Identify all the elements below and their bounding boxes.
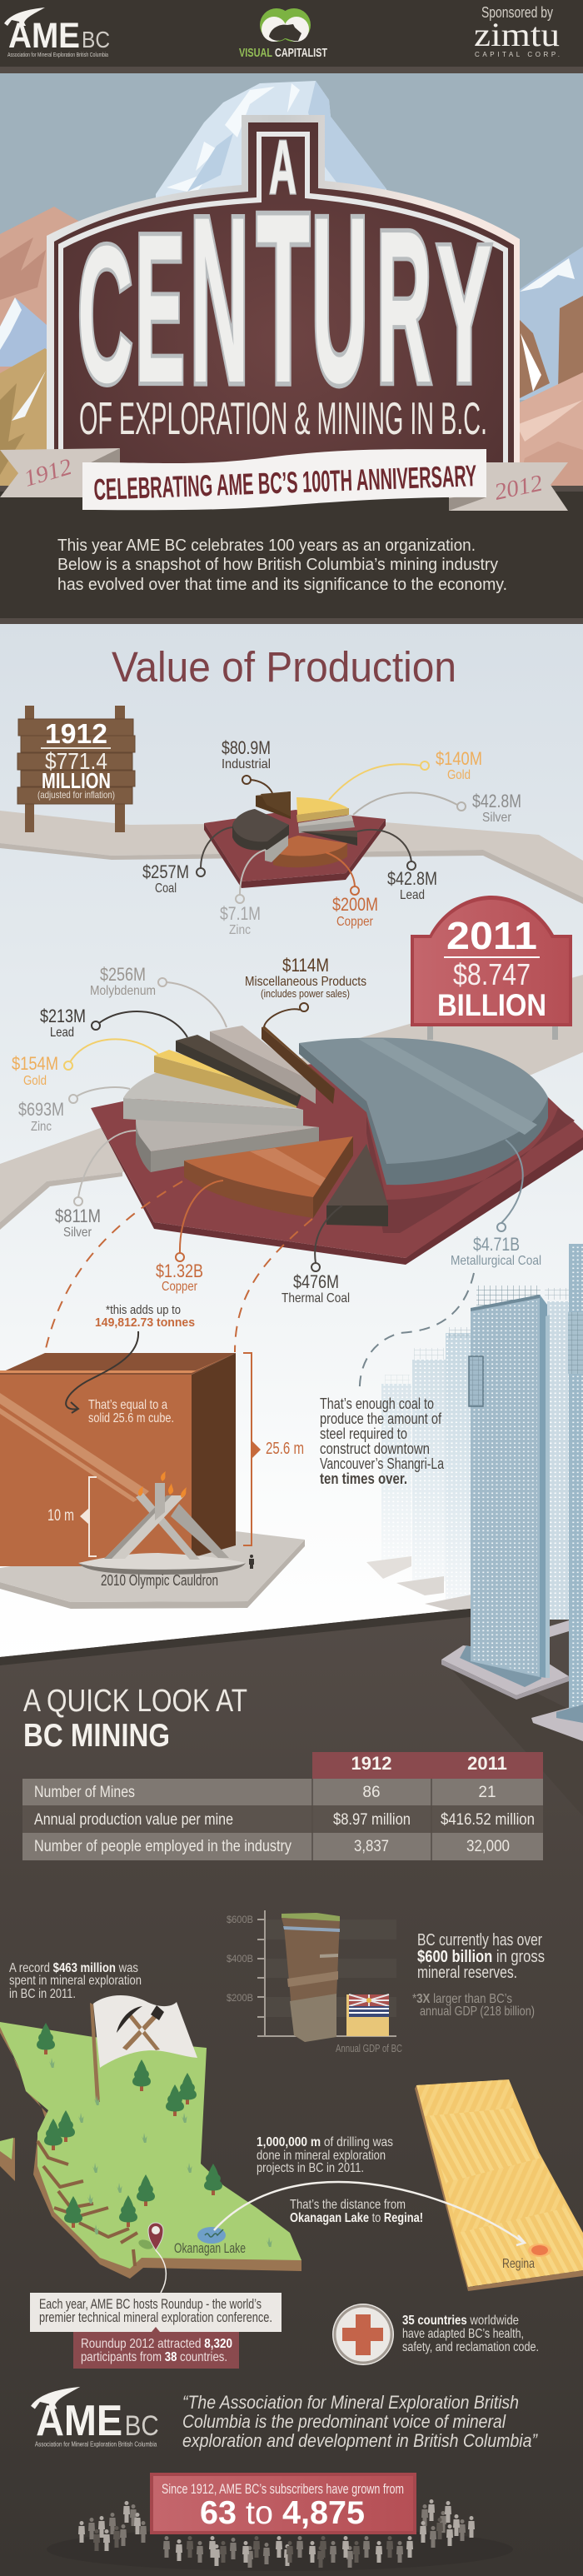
- label: copper: [332, 894, 378, 929]
- sponsor: zimtu: CAPITAL CORP.: [475, 51, 560, 58]
- sky and mountains: [0, 73, 583, 500]
- fjord edges: [37, 2141, 137, 2266]
- ribbon banner: [0, 448, 568, 511]
- dark lower section background: [0, 1597, 583, 2576]
- map: British Columbia: [0, 2022, 301, 2279]
- callout: subscribers: Since 1912, AME BC’s subscribers have grown from: [162, 2481, 404, 2497]
- cauldron flames: [138, 1471, 187, 1498]
- mountain: snow right: [516, 247, 583, 400]
- label: copper: [156, 1261, 203, 1294]
- note text: steel required to: [320, 1425, 407, 1442]
- bracket: 25.6 m height: 25.6 m: [266, 1440, 304, 1458]
- logo: Visual Capitalist: CAPITALIST: [275, 46, 327, 60]
- callout: subscribers: 63 to 4,875: [200, 2495, 365, 2531]
- mountain: main peak: [156, 81, 386, 250]
- towers: foreground: [441, 1244, 583, 1816]
- sign: 1912 value: [17, 706, 135, 832]
- attendance box: Roundup 2012 attracted 8,320: [81, 2337, 232, 2351]
- label: silver: $42.8M: [472, 791, 521, 811]
- tower: main: [441, 1286, 569, 1700]
- callout line: metallurgical coal: [501, 1140, 523, 1223]
- title word CENTURY: E: [135, 192, 185, 427]
- sign: 1912 value: $771.4: [45, 748, 107, 774]
- text: distance: That’s the distance from: [290, 2198, 406, 2212]
- platform under cube: [0, 1531, 305, 1609]
- cube note text: That’s equal to a: [88, 1398, 167, 1412]
- table header: [312, 1752, 543, 1779]
- text: drilling: done in mineral exploration: [257, 2149, 386, 2163]
- label: lead: Lead: [400, 888, 425, 902]
- text: safety code: have adapted BC’s health,: [402, 2327, 524, 2341]
- sign: 1912 value: (adjusted for inflation): [37, 789, 115, 801]
- grass tufts: [49, 2058, 272, 2247]
- bar: BC GDP flag: [346, 1994, 389, 2036]
- note text: produce the amount of: [320, 1410, 442, 1427]
- text: drilling: projects in BC in 2011.: [257, 2161, 364, 2175]
- mountain: brown right: [516, 296, 583, 400]
- logo: AME BC footer: BC: [125, 2410, 159, 2442]
- label: lead: $213M: [40, 1006, 86, 1026]
- label: zinc: Zinc: [229, 923, 251, 937]
- sign: 1912 value: MILLION: [42, 768, 111, 793]
- callout: Roundup: [30, 2250, 282, 2369]
- pin: Vancouver: [137, 2223, 163, 2251]
- table row: value per mine: $8.97 million: [333, 1811, 411, 1829]
- callout line: coal: [201, 827, 232, 868]
- text: gross mineral reserves: [412, 1931, 545, 2019]
- label: industrial: $80.9M: [222, 737, 271, 758]
- label: coal: Coal: [155, 881, 177, 896]
- sponsor: zimtu: [474, 4, 560, 58]
- bracket: 10 m height: [47, 1477, 97, 1556]
- text: safety code: 35 countries worldwide: [402, 2314, 519, 2328]
- logo: AME BC: AME: [8, 16, 80, 56]
- sign legs: [427, 1026, 558, 1040]
- label: lead: Lead: [50, 1026, 74, 1040]
- year 1912: 1912: [21, 454, 75, 492]
- tonnes note: 149,812.73 tonnes: [95, 1315, 195, 1330]
- label: silver: [472, 791, 521, 825]
- attendance box: [73, 2327, 239, 2369]
- label: silver: Silver: [63, 1226, 92, 1240]
- text: gross mineral reserves: *3X larger than BC’s: [412, 1992, 512, 2006]
- label: gold: $140M: [436, 748, 482, 769]
- slice: gold: [154, 1050, 296, 1108]
- labels: 2011 values: [12, 955, 541, 1305]
- sign: 2011 value: 2011: [446, 914, 537, 957]
- note text: That’s enough coal to: [320, 1395, 434, 1412]
- slice: copper: [184, 1136, 353, 1218]
- road: upper: [0, 811, 583, 904]
- quote: exploration and development in British Columbia”: [182, 2430, 538, 2451]
- label: miscellaneous: Miscellaneous Products: [245, 975, 366, 989]
- label: gold: Gold: [23, 1074, 47, 1088]
- crowd: mid-tone people: [88, 2504, 466, 2568]
- Roundup box: Each year, AME BC hosts Roundup - the world’s: [39, 2297, 262, 2312]
- label: lead: [387, 868, 437, 902]
- table row: mines: 21: [478, 1784, 496, 1801]
- dashed line: coal to note: [360, 1273, 474, 1394]
- label: zinc: $7.1M: [220, 903, 261, 924]
- cube: copper volume: [0, 1353, 236, 1566]
- prairie: Saskatchewan block: [415, 2079, 583, 2291]
- heading: Value of Production: Value of Production: [112, 643, 456, 691]
- ribbon main: [82, 449, 486, 510]
- callout line: zinc: [240, 850, 266, 895]
- tower: mid-ground faded: [545, 1288, 571, 1637]
- chart: mineral reserves vs GDP: $200B: [227, 1992, 253, 2004]
- text: gross mineral reserves: $600 billion in gross: [417, 1948, 545, 1966]
- cube note text: [88, 1398, 174, 1425]
- slice: zinc: [265, 835, 288, 862]
- intro text: Below is a snapshot of how British Columbia’s mining industry: [57, 556, 498, 574]
- label: industrial: Industrial: [222, 757, 271, 771]
- slice: metallurgical coal: [299, 1038, 548, 1185]
- label: coal: $257M: [142, 861, 189, 882]
- text: safety code: [402, 2314, 539, 2354]
- ribbon right tail: [449, 462, 568, 511]
- logo: AME BC: Association for Mineral Exploration British Columbia: [7, 52, 108, 58]
- text: drilling: 1,000,000 m of drilling was: [257, 2135, 393, 2149]
- label: copper: $1.32B: [156, 1261, 203, 1281]
- label: thermal coal: Thermal Coal: [282, 1291, 350, 1305]
- logo: AME BC footer: AME: [36, 2397, 122, 2445]
- mountain: tan left: [0, 348, 58, 500]
- table row: mines: [22, 1779, 543, 1805]
- arrow: curved to cube note: [66, 1331, 138, 1413]
- callout line: lead: [357, 830, 411, 861]
- intro text: This year AME BC celebrates 100 years as an organization.: [57, 537, 476, 555]
- sign text: 1912: [45, 718, 107, 749]
- chart: mineral reserves vs GDP: $400B: [227, 1953, 253, 1964]
- callout line: copper: [180, 1181, 223, 1253]
- text: record exploration spending: [9, 1961, 142, 2001]
- label: coal: [142, 861, 189, 896]
- crowd of people: [47, 2499, 513, 2571]
- slice: miscellaneous: [262, 1026, 335, 1104]
- title word CENTURY: N: [190, 169, 249, 432]
- mountain: snow left: [0, 297, 58, 367]
- logo: AME BC footer: Association for Mineral Exploration British Columbia: [35, 2439, 157, 2448]
- label: thermal coal: [282, 1271, 350, 1305]
- table header: 2011: [467, 1753, 507, 1774]
- attendance box: participants from 38 countries.: [81, 2350, 227, 2364]
- label: gold: Gold: [447, 768, 471, 782]
- callout: subscribers: [150, 2473, 416, 2534]
- axis and ticks: [257, 1910, 396, 2036]
- prairie: Saskatchewan block: Regina: [502, 2257, 535, 2271]
- table row: value per mine: [22, 1805, 543, 1833]
- callout line: silver: [353, 792, 457, 815]
- label: molybdenum: [90, 964, 156, 998]
- table header: 1912: [351, 1753, 391, 1774]
- tower: right: [531, 1244, 583, 1741]
- bar: gross mineral reserves: [282, 1913, 340, 2042]
- callout line: copper: [326, 852, 355, 886]
- label: copper: Copper: [162, 1280, 198, 1294]
- icon: safety cross: [332, 2304, 394, 2365]
- intro text: [57, 537, 507, 594]
- callout line: gold: [70, 1039, 158, 1062]
- callout line: industrial: [251, 780, 272, 793]
- note text: Vancouver’s Shangri-La: [320, 1455, 445, 1472]
- label: copper: $200M: [332, 894, 378, 915]
- slice: lead: [176, 1035, 303, 1106]
- slice: copper: [273, 836, 347, 867]
- lake: Okanagan: [174, 2227, 246, 2256]
- icon: Olympic cauldron: [78, 1471, 254, 1575]
- tonnes note: *this adds up to: [106, 1303, 181, 1317]
- label: silver: $811M: [55, 1206, 101, 1226]
- map land: [0, 2022, 301, 2269]
- label: miscellaneous: (includes power sales): [261, 987, 350, 1000]
- bracket: 25.6 m height: [243, 1353, 304, 1545]
- caption: Olympic cauldron: 2010 Olympic Cauldron: [101, 1572, 218, 1589]
- caption: annual GDP: Annual GDP of BC: [336, 2042, 402, 2054]
- tonnes note: [95, 1303, 195, 1330]
- title word CENTURY: C: [77, 205, 132, 423]
- label: copper: Copper: [336, 915, 374, 929]
- sign posts: [25, 706, 125, 832]
- callout line: thermal coal: [315, 1206, 342, 1263]
- Regina marker: [528, 2244, 551, 2257]
- intro section: [0, 486, 583, 624]
- ribbon left tail: [0, 448, 120, 497]
- text: gross mineral reserves: mineral reserves.: [417, 1964, 517, 1982]
- chart: mineral reserves vs GDP: [227, 1910, 402, 2054]
- platter: [91, 1108, 583, 1265]
- sign: 2011 value: $8.747: [453, 957, 531, 991]
- slice: lead: [301, 831, 357, 846]
- dashed lines: copper to cube: [45, 1181, 312, 1352]
- label: gold: $154M: [12, 1053, 58, 1074]
- text: safety code: safety, and reclamation code.: [402, 2340, 539, 2354]
- title word CENTURY: [77, 164, 492, 433]
- callout line: molybdenum: [167, 982, 227, 1027]
- table row: mines: Number of Mines: [34, 1784, 135, 1801]
- text: distance: Okanagan Lake to Regina!: [290, 2211, 423, 2225]
- title shield: [47, 115, 520, 517]
- note text: construct downtown: [320, 1440, 430, 1457]
- crowd: dark people: [93, 2518, 443, 2568]
- text: drilling: [257, 2135, 393, 2175]
- text: record exploration spending: in BC in 2011.: [9, 1987, 76, 2001]
- sponsor: zimtu: Sponsored by: [481, 4, 553, 21]
- Roundup box: premier technical mineral exploration conference.: [39, 2310, 272, 2325]
- logo: AME BC: BC: [82, 27, 110, 52]
- note: coal to steel: [320, 1273, 474, 1487]
- title word CENTURY: T: [257, 164, 310, 433]
- slice: silver: [298, 815, 355, 833]
- label: metallurgical coal: [451, 1234, 541, 1268]
- callouts: 2011 values: [64, 978, 523, 1271]
- cauldron legs: [104, 1483, 229, 1560]
- callout line: silver: [78, 1131, 136, 1197]
- cube note with arrow: [66, 1303, 195, 1425]
- bracket: 10 m height: 10 m: [47, 1507, 74, 1525]
- table row: employed: Number of people employed in the industry: [34, 1838, 292, 1855]
- title letter A: A: [269, 125, 296, 210]
- mountain: pink right: [516, 372, 583, 492]
- line: pin to callout: [156, 2250, 166, 2293]
- label: thermal coal: $476M: [293, 1271, 339, 1292]
- flag: pick and hammer: [90, 1995, 197, 2105]
- text: record exploration spending: A record $463 million was: [9, 1961, 138, 1975]
- callout line: gold: [329, 764, 421, 800]
- quote: “The Association for Mineral Exploration British: [182, 2392, 519, 2413]
- title word CENTURY: R: [376, 186, 431, 428]
- trees: [37, 2023, 222, 2228]
- sign planks: [17, 719, 135, 804]
- text: gross mineral reserves: annual GDP (218 billion): [420, 2004, 535, 2019]
- logo: AME BC footer: [31, 2387, 159, 2448]
- label: molybdenum: Molybdenum: [90, 984, 156, 998]
- sponsor: zimtu: zimtu: [474, 16, 560, 53]
- slice: thermal coal: [326, 1144, 388, 1226]
- towers: faded background: [366, 1327, 471, 1616]
- heading: A Quick Look at BC Mining: [23, 1684, 247, 1754]
- labels: 1912 values: [142, 737, 521, 937]
- text: gross mineral reserves: BC currently has over: [417, 1931, 542, 1949]
- callout line: zinc: [77, 1087, 130, 1096]
- header bar: [0, 0, 583, 73]
- slice: zinc: [123, 1071, 303, 1126]
- crowd: light people: [78, 2499, 475, 2566]
- title word CENTURY: Y: [436, 205, 492, 424]
- platter: [204, 819, 386, 888]
- sign: 2011 value: BILLION: [437, 988, 546, 1022]
- slice: gold: [296, 797, 349, 822]
- label: silver: Silver: [482, 811, 512, 825]
- note text: [320, 1395, 445, 1487]
- label: silver: [55, 1206, 101, 1240]
- lake: Okanagan: Okanagan Lake: [174, 2240, 246, 2256]
- label: lead: [40, 1006, 86, 1040]
- heading: A Quick Look at BC Mining: A QUICK LOOK AT: [23, 1684, 247, 1719]
- text: distance: [290, 2198, 423, 2225]
- slice: molybdenum: [210, 1026, 316, 1104]
- cube note text: solid 25.6 m cube.: [88, 1411, 174, 1425]
- label: gold: [436, 748, 482, 782]
- heading: A Quick Look at BC Mining: BC MINING: [23, 1718, 170, 1754]
- label: lead: $42.8M: [387, 868, 437, 889]
- island: Vancouver Island: [0, 2138, 15, 2181]
- mountain: pink left: [0, 207, 100, 400]
- page background: light section: [0, 624, 583, 1665]
- label: molybdenum: $256M: [100, 964, 146, 985]
- label: gold: [12, 1053, 58, 1088]
- arrow: Okanagan Lake to Regina: [214, 2182, 525, 2245]
- logo: AME BC: [4, 7, 110, 58]
- table row: employed: [22, 1833, 543, 1860]
- slice: silver: [136, 1119, 319, 1172]
- label: zinc: Zinc: [31, 1120, 52, 1134]
- cube light stripe: [0, 1393, 149, 1502]
- label: zinc: [220, 903, 261, 937]
- note text: ten times over.: [320, 1470, 407, 1487]
- slice: coal: [232, 809, 289, 851]
- map edge: [0, 2022, 301, 2279]
- year 2012: 2012: [492, 470, 545, 506]
- table row: value per mine: $416.52 million: [441, 1811, 535, 1829]
- chart: mineral reserves vs GDP: $600B: [227, 1914, 253, 1925]
- quote: [182, 2392, 538, 2451]
- label: miscellaneous: $114M: [282, 955, 329, 976]
- person for scale: [249, 1555, 254, 1569]
- chart: 1912 production pie: [204, 791, 386, 888]
- quote: Columbia is the predominant voice of mineral: [182, 2411, 506, 2432]
- logo: Visual Capitalist: [239, 8, 327, 60]
- callouts: 1912 values: [197, 761, 466, 903]
- table row: mines: 86: [362, 1784, 381, 1801]
- sign: 2011 value: [411, 896, 572, 1040]
- slice: industrial: [256, 791, 291, 819]
- chart bands: [265, 1920, 396, 2017]
- label: miscellaneous: [245, 955, 366, 1000]
- table row: value per mine: Annual production value per mine: [34, 1811, 233, 1829]
- table row: employed: 3,837: [354, 1838, 389, 1855]
- road: lower: [0, 975, 583, 1230]
- Roundup box: [30, 2293, 282, 2332]
- label: metallurgical coal: Metallurgical Coal: [451, 1254, 541, 1268]
- table: 1912 vs 2011: [22, 1752, 543, 1860]
- chart: 2011 production pie: [91, 1026, 583, 1265]
- tower shadows: [441, 1658, 583, 1816]
- callout line: lead: [99, 1011, 187, 1037]
- intro text: has evolved over that time and its significance to the economy.: [57, 576, 507, 594]
- table row: employed: 32,000: [466, 1838, 510, 1855]
- label: industrial: [222, 737, 271, 771]
- title word CENTURY: U: [311, 168, 368, 432]
- callout line: miscellaneous: [264, 1009, 300, 1027]
- text: record exploration spending: spent in mineral exploration: [9, 1974, 142, 1988]
- sign board: [411, 896, 572, 1026]
- label: zinc: [18, 1099, 64, 1134]
- logo: Visual Capitalist: VISUAL: [239, 46, 272, 60]
- label: metallurgical coal: $4.71B: [473, 1234, 520, 1255]
- label: zinc: $693M: [18, 1099, 64, 1120]
